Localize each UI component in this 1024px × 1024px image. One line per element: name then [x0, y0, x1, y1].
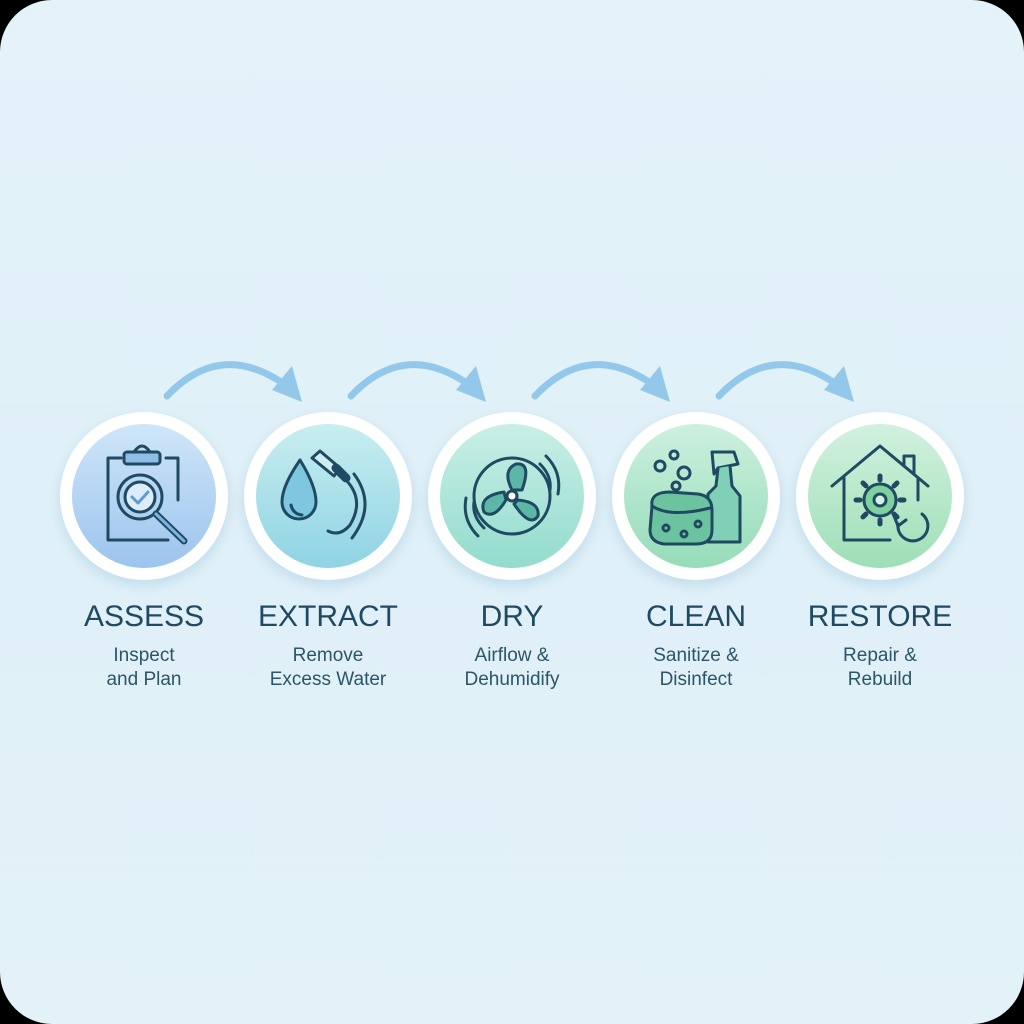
step 5: restore	[796, 412, 964, 580]
icon: sponge and spray	[650, 451, 740, 544]
step 2: extract	[244, 412, 412, 580]
label: clean: CLEAN	[646, 600, 746, 633]
label: extract: Remove	[293, 645, 363, 666]
label: assess: and Plan	[106, 669, 182, 690]
label: clean: Disinfect	[660, 669, 733, 690]
icon: house with gear	[832, 446, 928, 541]
label: assess: Inspect	[113, 645, 175, 666]
label: restore: Repair &	[843, 645, 917, 666]
arrow 4	[719, 365, 854, 402]
arrow 3	[535, 365, 670, 402]
icon: drop and hose	[282, 451, 365, 538]
label: clean	[646, 600, 746, 690]
label: restore	[808, 600, 952, 690]
step 3: dry	[428, 412, 596, 580]
label: dry: Dehumidify	[464, 669, 560, 690]
label: dry: DRY	[481, 600, 543, 633]
label: restore: Rebuild	[848, 669, 912, 690]
label: clean: Sanitize &	[653, 645, 739, 666]
label: restore: RESTORE	[808, 600, 952, 633]
label: dry: Airflow &	[475, 645, 550, 666]
step 1: assess	[60, 412, 228, 580]
icon: fan	[465, 456, 559, 536]
icon: clipboard magnifier	[108, 446, 184, 541]
labels	[84, 600, 952, 690]
label: dry	[464, 600, 560, 690]
arrow 2	[351, 365, 486, 402]
step 4: clean	[612, 412, 780, 580]
label: assess	[84, 600, 204, 690]
arrow 1	[167, 365, 302, 402]
label: extract	[258, 600, 398, 690]
label: extract: EXTRACT	[258, 600, 398, 633]
arrows	[167, 365, 854, 402]
label: extract: Excess Water	[270, 669, 387, 690]
label: assess: ASSESS	[84, 600, 204, 633]
